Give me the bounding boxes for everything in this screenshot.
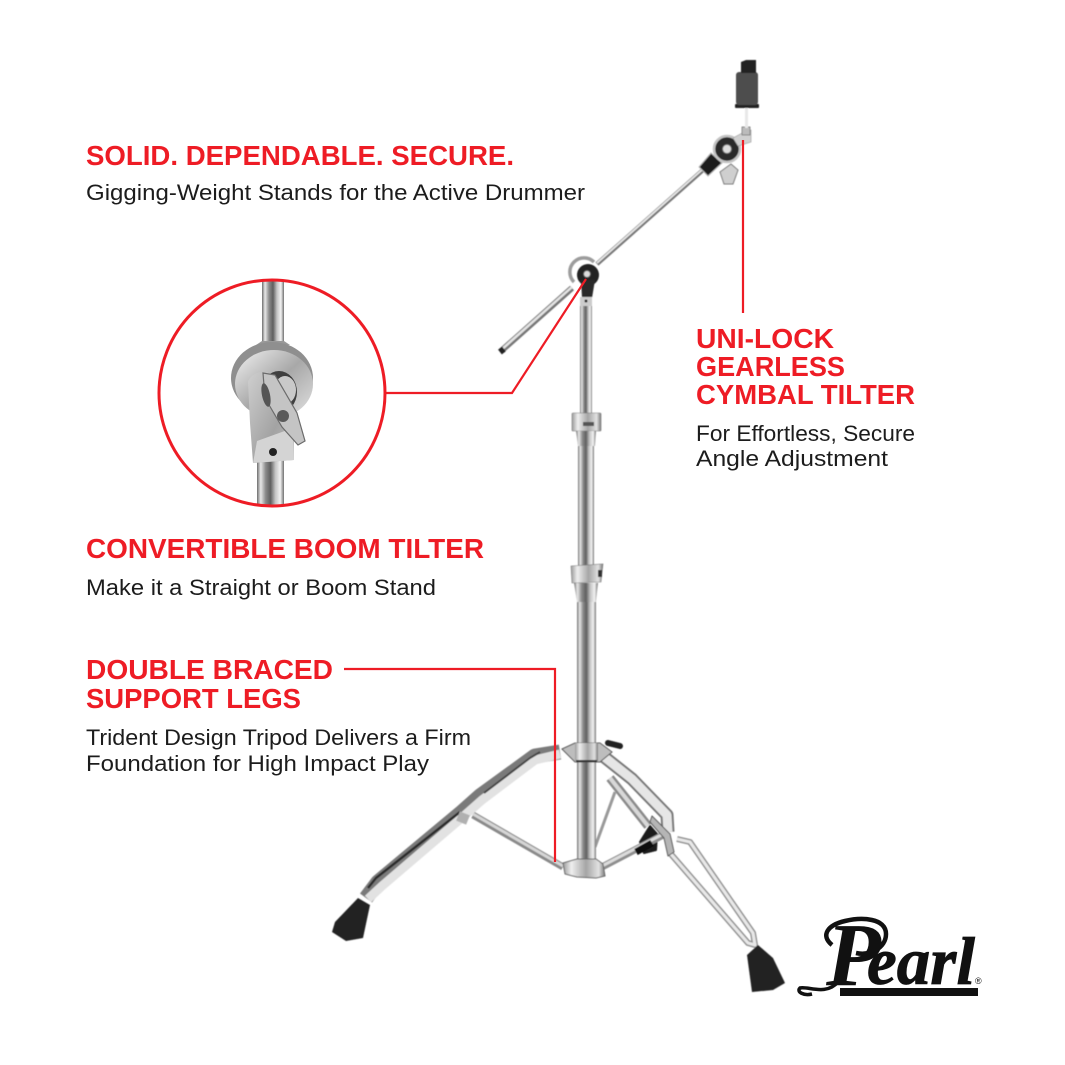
inset lower tube: [257, 460, 284, 508]
logo: Pearl: earl: [867, 923, 975, 999]
tripod bottom collar: [563, 859, 605, 878]
logo: Pearl: P: [825, 906, 882, 1005]
heading: uni-lock gearless cymbal tilter: [696, 323, 915, 410]
right leg: [650, 816, 755, 945]
boom tilter joint: [570, 258, 599, 306]
boom arm: [500, 169, 703, 352]
inset upper rod: [262, 278, 284, 344]
middle tube: [578, 430, 594, 566]
left brace: [473, 814, 563, 867]
heading: solid dependable secure: SOLID. DEPENDABLE. SECURE.: [86, 140, 514, 171]
lower height clamp: [571, 564, 603, 602]
heading: uni-lock gearless cymbal tilter: CYMBAL TILTER: [696, 379, 915, 410]
cymbal tilter: [699, 127, 751, 184]
upper height clamp: [572, 413, 601, 446]
inset lever: [263, 373, 305, 445]
right foot: [747, 945, 785, 992]
inset disk: [231, 341, 313, 418]
heading: double braced support legs: SUPPORT LEGS: [86, 683, 301, 714]
left foot: [332, 898, 370, 941]
description: trident tripod: Foundation for High Impact Play: [86, 751, 429, 776]
callout line: boom tilter: [386, 279, 586, 393]
product photo: boom cymbal stand: [332, 60, 785, 992]
tripod top collar: [562, 743, 612, 762]
upper tube: [580, 300, 592, 415]
left leg: [366, 752, 560, 899]
cymbal felt and wing nut: [735, 60, 759, 128]
description: angle adjustment: [696, 421, 915, 471]
heading: convertible boom tilter: CONVERTIBLE BOOM TILTER: [86, 533, 484, 564]
infographic canvas: [86, 59, 982, 996]
callout line: cymbal tilter: [742, 140, 744, 313]
description: straight or boom: Make it a Straight or Boom Stand: [86, 575, 436, 600]
inset ring: [159, 280, 385, 506]
heading: double braced support legs: DOUBLE BRACED: [86, 654, 333, 685]
description: trident tripod: [86, 725, 471, 776]
description: angle adjustment: For Effortless, Secure: [696, 421, 915, 446]
logo: Pearl: [799, 906, 982, 1005]
callout line: double braced legs: [344, 669, 555, 862]
heading: uni-lock gearless cymbal tilter: GEARLESS: [696, 351, 845, 382]
subheading: gigging-weight stands: Gigging-Weight Stands for the Active Drummer: [86, 180, 585, 205]
heading: double braced support legs: [86, 654, 333, 714]
heading: uni-lock gearless cymbal tilter: UNI-LOCK: [696, 323, 834, 354]
description: angle adjustment: Angle Adjustment: [696, 446, 888, 471]
description: trident tripod: Trident Design Tripod Delivers a Firm: [86, 725, 471, 750]
lower tube: [577, 585, 596, 870]
logo: Pearl: ®: [975, 976, 982, 986]
inset bracket: [248, 372, 294, 463]
inset circle: boom tilter detail: [159, 278, 385, 508]
rear leg of tripod: [595, 743, 668, 867]
